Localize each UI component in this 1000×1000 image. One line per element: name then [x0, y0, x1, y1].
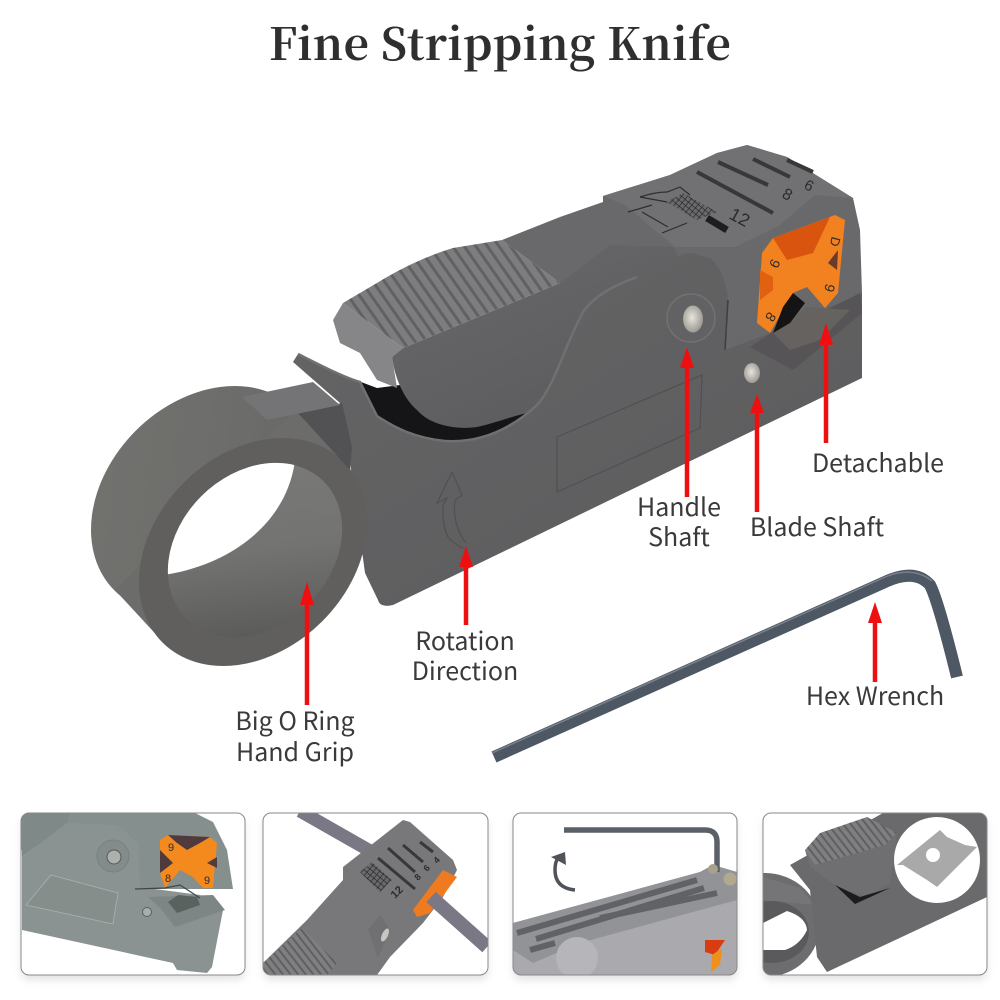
black gap [345, 376, 540, 445]
panel: cable in tool: 12 [389, 884, 406, 901]
label recess [557, 375, 702, 492]
panel: open blade view: 9 [204, 875, 210, 887]
rotation arrow mark [437, 472, 466, 548]
handle shaft pin [667, 294, 715, 342]
orange blade holder: D [827, 235, 844, 248]
panel: cable in tool [263, 811, 488, 980]
title: Fine Stripping Knife [269, 9, 731, 73]
scale markings [628, 159, 816, 233]
panel: cable in tool: 6 [421, 863, 432, 873]
callout: big O ring: Big O Ring [235, 702, 355, 738]
callout: blade shaft: Blade Shaft [750, 508, 885, 544]
panel: open blade view: 8 [165, 873, 171, 885]
panel: spare blade view [761, 812, 989, 982]
orange blade holder [757, 215, 845, 333]
callout: hex wrench [806, 602, 944, 713]
scale markings: 6 [801, 177, 816, 195]
scale markings: 8 [779, 186, 795, 205]
callout: rotation direction [412, 546, 518, 688]
callout: handle shaft [637, 347, 721, 554]
callout: detachable: Detachable [812, 444, 944, 480]
blade shaft pin [744, 363, 760, 383]
body side plate [293, 253, 862, 606]
panel: cable in tool: 8 [412, 872, 423, 882]
stripping knife tool [91, 145, 862, 666]
panel: cable in tool: 4 [431, 855, 442, 865]
callout: handle shaft: Handle [637, 488, 721, 524]
big O ring [91, 382, 362, 666]
callout: big O ring [235, 582, 355, 769]
scale markings: 12 [726, 204, 753, 231]
callout: blade shaft [750, 394, 885, 544]
hex wrench [492, 572, 957, 757]
callout: big O ring: Hand Grip [236, 733, 354, 769]
panel: hex wrench use [513, 813, 737, 980]
callout: detachable [812, 323, 944, 480]
callout: rotation direction: Rotation [415, 622, 515, 658]
detachable blade holder [750, 293, 862, 370]
ring tab [267, 403, 352, 470]
orange blade holder: 9 [821, 282, 839, 294]
orange blade holder: 9 [766, 257, 784, 271]
callout: handle shaft: Shaft [648, 518, 710, 554]
orange blade holder: 8 [762, 309, 780, 325]
panel: open blade view: 9 [168, 842, 174, 854]
panel: open blade view [21, 813, 245, 980]
callout: rotation direction: Direction [412, 652, 518, 688]
lever handle [333, 240, 700, 428]
cutter cap [502, 145, 862, 352]
callout: hex wrench: Hex Wrench [806, 677, 944, 713]
